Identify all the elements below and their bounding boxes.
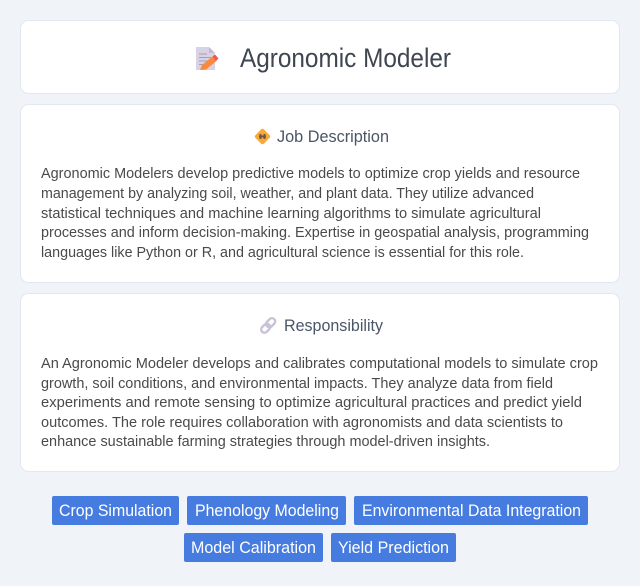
text block: responsibility: outcomes. The role requires collaboration with agronomists and data scientists to xyxy=(41,415,563,431)
text block: job description: management by analyzing soil, weather, and plant data. They utilize advanced xyxy=(41,186,534,202)
text block: job description: processes and inform decision-making. Expertise in geospatial analysis, programming xyxy=(41,225,589,241)
icon: document with pencil xyxy=(196,47,218,70)
tag: yield prediction xyxy=(331,533,456,562)
text block: responsibility: An Agronomic Modeler develops and calibrates computational models to simulate crop xyxy=(41,356,598,372)
tag: crop simulation: Crop Simulation xyxy=(59,501,172,520)
tag: model calibration: Model Calibration xyxy=(191,538,316,557)
tag: phenology modeling xyxy=(187,496,346,525)
icon: diamond sign xyxy=(254,128,271,145)
text block: responsibility xyxy=(41,356,598,450)
heading: job description: Job Description xyxy=(277,127,389,146)
heading: responsibility: Responsibility xyxy=(284,316,384,335)
tag: environmental data integration: Environmental Data Integration xyxy=(362,501,581,520)
title text: Agronomic Modeler xyxy=(240,43,451,73)
tag: crop simulation xyxy=(52,496,179,525)
icon: chain link xyxy=(260,317,277,334)
panel: responsibility xyxy=(20,294,620,472)
text block: responsibility: experiments and remote sensing to optimize agricultural practices and predict yield xyxy=(41,395,582,411)
text block: responsibility: enhance sustainable farming strategies through model-driven insights. xyxy=(41,434,490,450)
tag: environmental data integration xyxy=(354,496,588,525)
text block: responsibility: growth, soil conditions, and environmental impacts. They analyze data from field xyxy=(41,376,553,392)
panel: job description xyxy=(20,104,620,282)
tag: yield prediction: Yield Prediction xyxy=(338,538,449,557)
tag: phenology modeling: Phenology Modeling xyxy=(195,501,339,520)
panel: title xyxy=(20,20,620,94)
tags xyxy=(52,496,588,562)
text block: job description: statistical techniques and machine learning algorithms to simulate agricultural xyxy=(41,206,541,222)
text block: job description: languages like Python or R, and agricultural science is essential for this role. xyxy=(41,245,524,261)
text block: job description xyxy=(41,166,589,261)
text block: job description: Agronomic Modelers develop predictive models to optimize crop yields and resource xyxy=(41,166,580,182)
tag: model calibration xyxy=(184,533,323,562)
